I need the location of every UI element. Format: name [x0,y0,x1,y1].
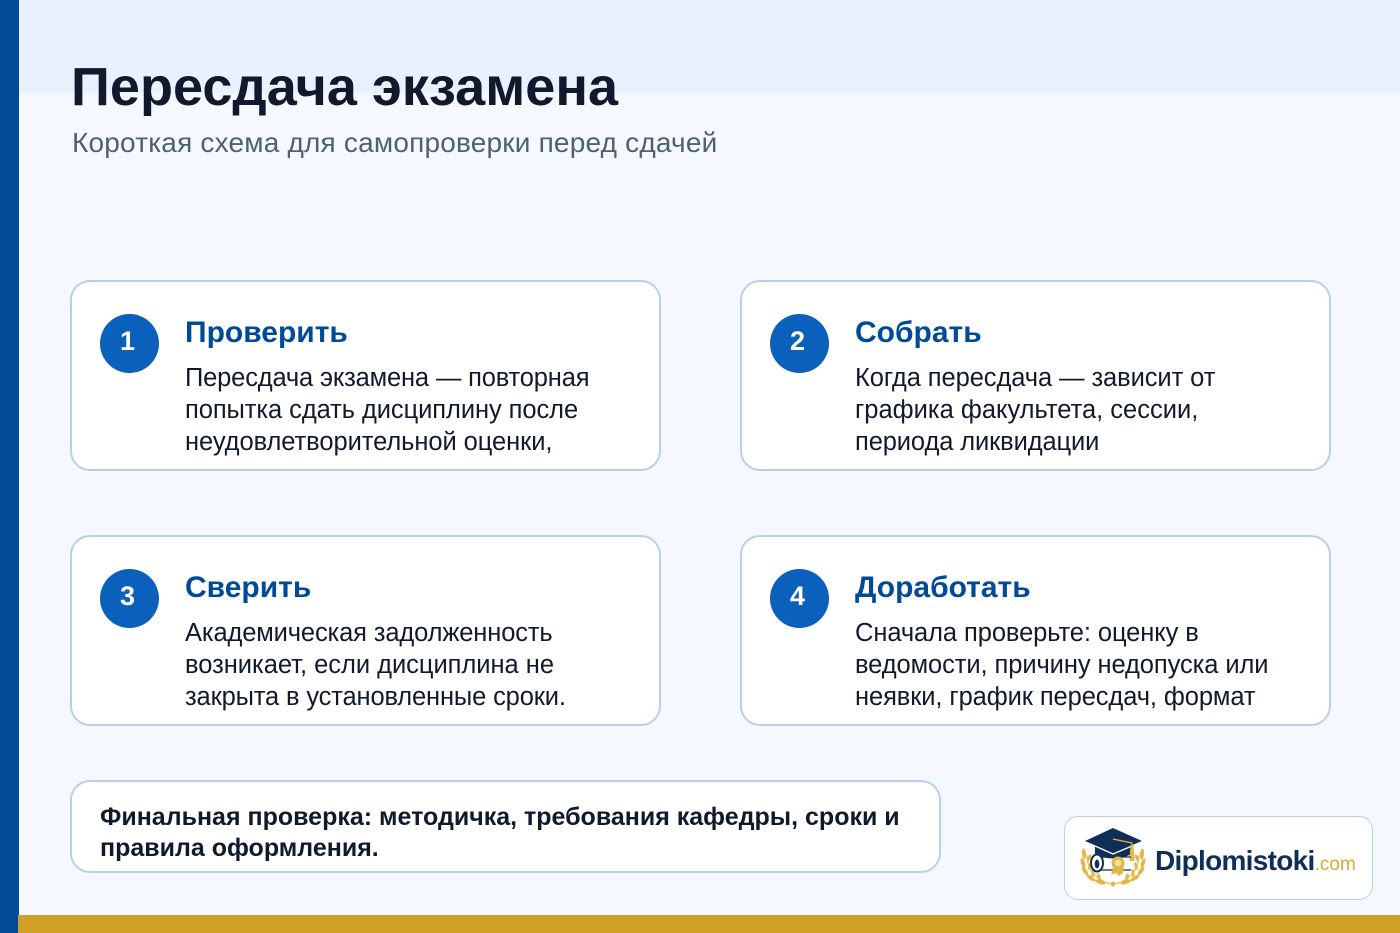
step number 2 [770,314,829,373]
heading: step 1: Проверить [185,316,348,349]
text: step 2: Когда пересдача — зависит от [855,364,1215,392]
step number 3 [100,569,159,628]
panel: step 3 [70,535,661,726]
step number 4 [770,569,829,628]
text: step 1 [185,364,589,456]
step number 3: 3 [120,581,135,611]
step number 4: 4 [790,581,805,611]
left accent bar [0,0,19,933]
text: step 2: периода ликвидации [855,428,1099,456]
bottom accent bar [18,915,1400,933]
text: step 3: возникает, если дисциплина не [185,651,554,679]
text: step 1: неудовлетворительной оценки, [185,428,552,456]
logo panel [1064,816,1373,900]
callout text [100,803,900,862]
heading: step 2: Собрать [855,316,982,349]
text: step 3: закрыта в установленные сроки. [185,683,566,711]
heading: step 3: Сверить [185,571,311,604]
icon: graduation cap with wreath and diploma [1080,828,1146,886]
callout: final check [70,780,941,873]
title: Пересдача экзамена [71,57,618,117]
text: step 3 [185,619,566,711]
text: step 4: Сначала проверьте: оценку в [855,619,1199,647]
text: step 4: ведомости, причину недопуска или [855,651,1268,679]
subtitle: Короткая схема для самопроверки перед сдачей [72,127,717,158]
step number 1 [100,314,159,373]
header band [18,0,1400,93]
callout text: Финальная проверка: методичка, требования кафедры, сроки и [100,803,900,831]
panel: step 1 [70,280,661,471]
text: step 2 [855,364,1215,456]
text: step 1: Пересдача экзамена — повторная [185,364,589,392]
text: step 1: попытка сдать дисциплину после [185,396,578,424]
text: step 2: графика факультета, сессии, [855,396,1198,424]
callout text: правила оформления. [100,834,379,862]
step number 1: 1 [120,326,135,356]
panel: step 2 [740,280,1331,471]
logo wordmark: Diplomistoki.com [1155,845,1356,876]
text: step 3: Академическая задолженность [185,619,553,647]
panel: step 4 [740,535,1331,726]
step number 2: 2 [790,326,805,356]
text: step 4 [855,619,1268,711]
text: step 4: неявки, график пересдач, формат [855,683,1255,711]
heading: step 4: Доработать [855,571,1031,604]
